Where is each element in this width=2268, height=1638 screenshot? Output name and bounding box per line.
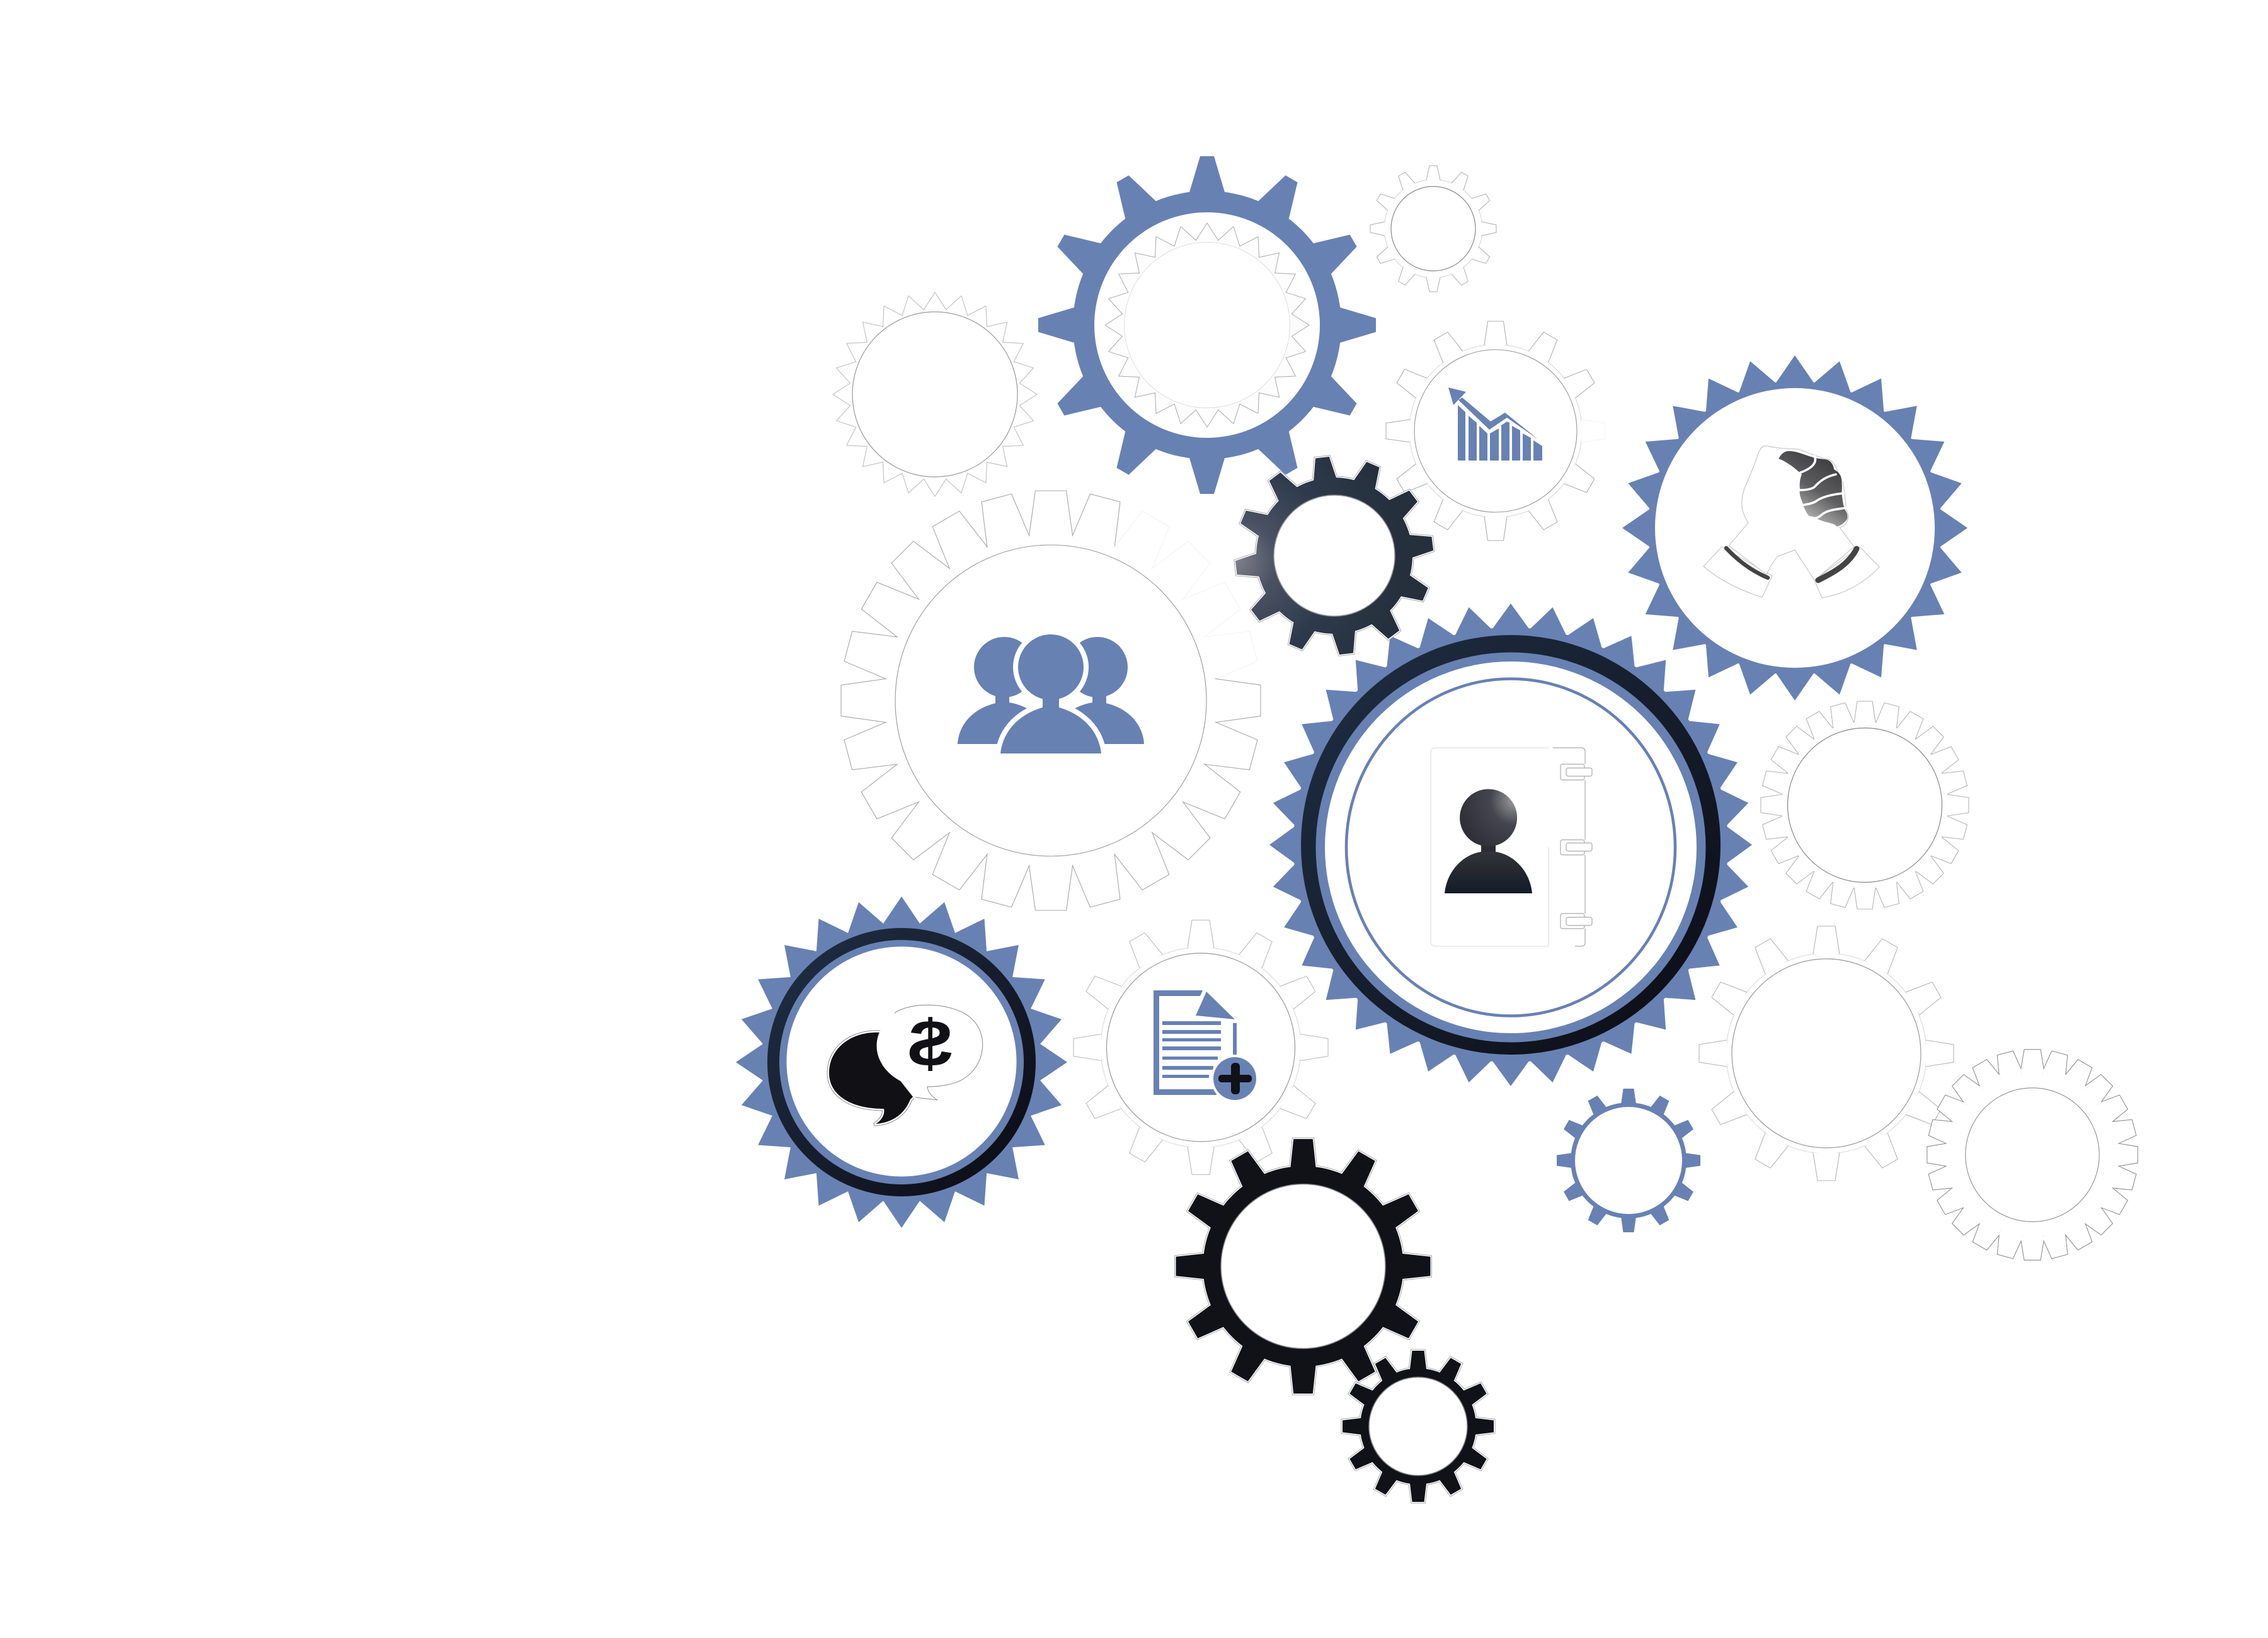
icon: three people bbox=[958, 634, 1144, 760]
gear: large black bottom bbox=[1176, 1139, 1430, 1394]
icon: clasped hands bbox=[1704, 446, 1879, 598]
icon: person silhouette bbox=[1445, 789, 1532, 893]
gear: blue with handshake icon bbox=[1622, 355, 1967, 701]
icon: speech bubbles with dollar: $ bbox=[908, 1006, 953, 1080]
icon: document with plus bbox=[1154, 990, 1259, 1102]
gear: large blue top with inner outline gear bbox=[1038, 156, 1376, 494]
gear cluster illustration bbox=[736, 156, 2138, 1503]
gear: double-line outline far right bbox=[1928, 1050, 2137, 1259]
gear: large outline with people icon bbox=[841, 491, 1261, 910]
gear: outline with chart icon bbox=[1386, 321, 1605, 541]
gear: small blue bbox=[1557, 1089, 1700, 1232]
gear: dark navy with gradient bbox=[1234, 455, 1435, 656]
gear: outline upper left bbox=[833, 292, 1037, 496]
gear: blue and dark ring with chat icon bbox=[736, 896, 1067, 1228]
icon: contact book bbox=[1431, 748, 1592, 946]
gear: central large blue and dark ring with contact book bbox=[1269, 604, 1752, 1086]
gear: outline right bbox=[1761, 701, 1969, 909]
icon: bar chart with arrow bbox=[1448, 387, 1542, 461]
gear: small outline top right bbox=[1370, 166, 1496, 292]
gear: outline lower right bbox=[1699, 926, 1954, 1181]
gear: outline with document icon bbox=[1074, 920, 1328, 1174]
gear: small black bottom bbox=[1343, 1351, 1494, 1502]
icon: speech bubbles with dollar bbox=[829, 1005, 983, 1124]
